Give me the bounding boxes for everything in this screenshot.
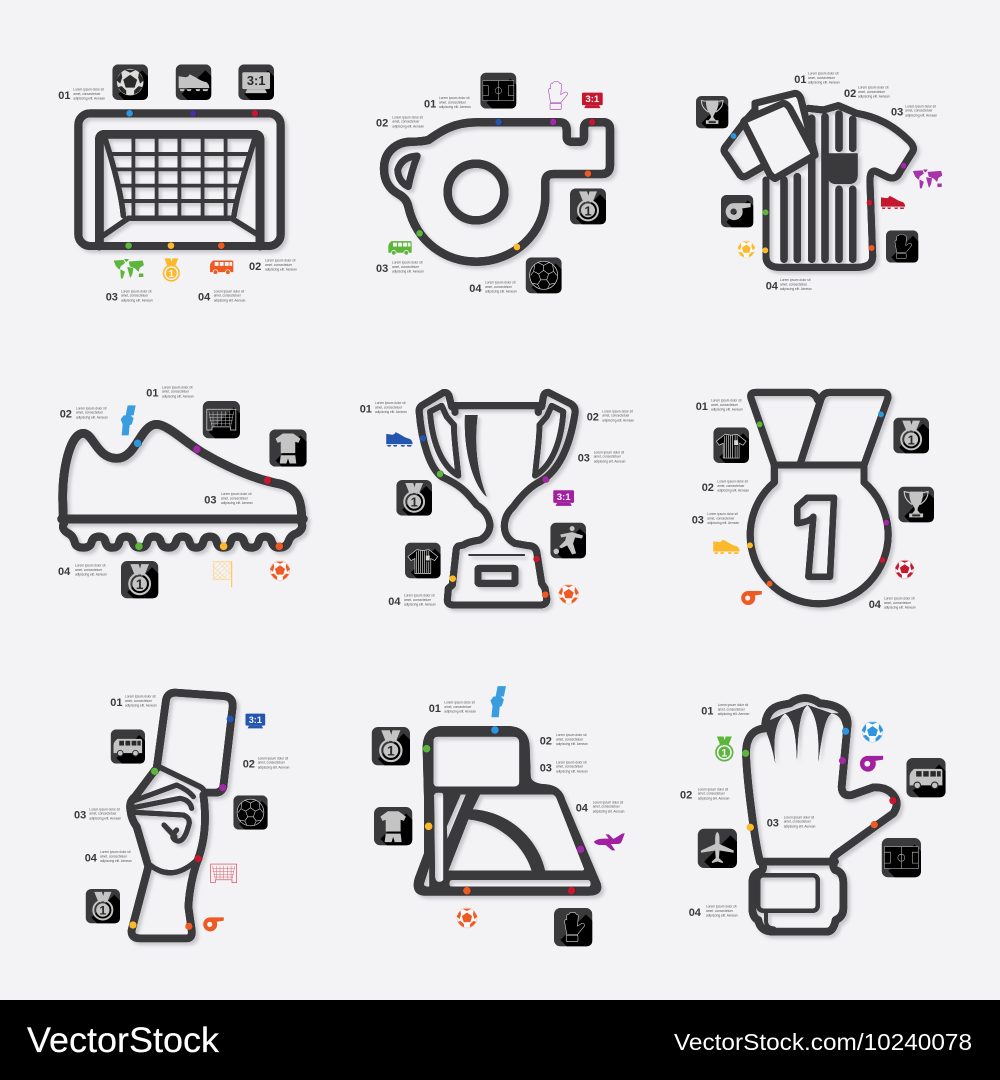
labels: 02: [540, 735, 552, 747]
labels: amet, consectetuer: [784, 820, 812, 824]
labels: [376, 96, 517, 295]
labels: 04: [576, 803, 589, 815]
panel: goal: [58, 64, 297, 304]
labels: Lorem ipsum dolor sit: [125, 695, 156, 699]
labels: amet, consectetuer: [100, 854, 128, 858]
labels: amet, consectetuer: [162, 390, 190, 394]
labels: Lorem ipsum dolor sit: [717, 480, 748, 484]
labels: adipiscing elit. Aenean: [905, 113, 937, 117]
labels: Lorem ipsum dolor sit: [718, 703, 748, 707]
labels: adipiscing elit. Aenean: [89, 816, 121, 820]
labels: 03: [74, 810, 86, 822]
labels: Lorem ipsum dolor sit: [444, 701, 475, 705]
labels: adipiscing elit. Aenean: [784, 824, 816, 828]
labels: 03: [376, 263, 388, 275]
panel: hand with card: [74, 693, 290, 938]
labels: Lorem ipsum dolor sit: [556, 760, 587, 764]
labels: adipiscing elit. Aenean: [556, 742, 588, 746]
labels: adipiscing elit. Aenean: [76, 415, 108, 419]
labels: 04: [469, 283, 482, 295]
labels: [360, 401, 634, 608]
panel: trophy: [360, 392, 634, 608]
route markers: [416, 119, 596, 250]
labels: adipiscing elit. Aenean: [404, 603, 436, 607]
footer brand: VectorStock: [27, 1021, 220, 1060]
labels: adipiscing elit. Aenean: [375, 410, 407, 414]
labels: Lorem ipsum dolor sit: [265, 259, 296, 263]
labels: adipiscing elit. Aenean: [858, 95, 890, 99]
labels: adipiscing elit. Aenean: [392, 124, 424, 128]
labels: adipiscing elit. Aenean: [75, 573, 107, 577]
labels: adipiscing elit. Aenean: [808, 81, 840, 85]
icons: [112, 64, 274, 281]
labels: Lorem ipsum dolor sit: [392, 115, 423, 119]
labels: 04: [766, 280, 779, 292]
labels: amet, consectetuer: [698, 792, 726, 796]
labels: amet, consectetuer: [905, 109, 933, 113]
labels: adipiscing elit. Aenean: [214, 298, 246, 302]
labels: Lorem ipsum dolor sit: [706, 905, 737, 909]
labels: 01: [58, 90, 71, 102]
labels: adipiscing elit. Aenean: [265, 268, 297, 272]
labels: Lorem ipsum dolor sit: [485, 281, 516, 285]
labels: amet, consectetuer: [121, 294, 149, 298]
labels: amet, consectetuer: [265, 263, 293, 267]
labels: 01: [110, 697, 123, 709]
labels: adipiscing elit. Aenean: [258, 765, 290, 769]
labels: 03: [692, 514, 704, 526]
labels: amet, consectetuer: [485, 285, 513, 289]
glove outline: [746, 698, 897, 932]
labels: 01: [701, 705, 714, 717]
labels: Lorem ipsum dolor sit: [121, 289, 152, 293]
icons: [698, 721, 946, 877]
labels: Lorem ipsum dolor sit: [858, 86, 889, 90]
labels: Lorem ipsum dolor sit: [784, 815, 814, 819]
icons: [388, 73, 606, 293]
labels: Lorem ipsum dolor sit: [100, 850, 131, 854]
labels: 01: [424, 98, 436, 110]
labels: Lorem ipsum dolor sit: [780, 278, 811, 282]
labels: adipiscing elit. Aenean: [707, 521, 739, 525]
labels: [692, 399, 916, 611]
labels: Lorem ipsum dolor sit: [73, 88, 104, 92]
labels: adipiscing elit. Aenean: [100, 859, 132, 863]
labels: Lorem ipsum dolor sit: [375, 401, 406, 405]
labels: 04: [58, 566, 71, 578]
icons: [372, 686, 625, 946]
route markers: [129, 715, 234, 930]
labels: Lorem ipsum dolor sit: [404, 594, 435, 598]
labels: amet, consectetuer: [258, 761, 286, 765]
labels: [429, 701, 625, 815]
labels: Lorem ipsum dolor sit: [89, 807, 120, 811]
route markers: [420, 435, 549, 598]
labels: Lorem ipsum dolor sit: [258, 756, 288, 760]
labels: adipiscing elit. Aenean: [485, 290, 517, 294]
labels: adipiscing elit. Aenean: [717, 489, 749, 493]
labels: adipiscing elit. Aenean: [780, 287, 812, 291]
labels: adipiscing elit. Aenean: [698, 796, 730, 800]
labels: 01: [429, 703, 441, 715]
icons: [86, 714, 268, 931]
labels: 03: [540, 763, 552, 775]
labels: Lorem ipsum dolor sit: [76, 406, 107, 410]
labels: amet, consectetuer: [221, 496, 249, 500]
labels: amet, consectetuer: [125, 699, 153, 703]
labels: 01: [146, 388, 159, 400]
panel: shin guard: [372, 686, 625, 946]
labels: 01: [360, 403, 372, 415]
labels: 04: [198, 292, 211, 304]
labels: Lorem ipsum dolor sit: [75, 564, 106, 568]
labels: [58, 385, 253, 578]
labels: amet, consectetuer: [858, 90, 886, 94]
labels: Lorem ipsum dolor sit: [162, 385, 193, 389]
labels: adipiscing elit. Aenean: [121, 298, 153, 302]
shirt outline: [724, 93, 913, 267]
labels: amet, consectetuer: [89, 812, 117, 816]
labels: adipiscing elit. Aenean: [593, 809, 625, 813]
labels: adipiscing elit. Aenean: [706, 914, 738, 918]
labels: Lorem ipsum dolor sit: [707, 512, 738, 516]
labels: adipiscing elit. Aenean: [125, 704, 157, 708]
footer image id: VectorStock.com/10240078: [674, 1029, 972, 1055]
labels: Lorem ipsum dolor sit: [905, 104, 936, 108]
labels: adipiscing elit. Aenean: [594, 459, 626, 463]
labels: amet, consectetuer: [556, 765, 584, 769]
labels: [766, 72, 937, 292]
labels: 03: [578, 453, 590, 465]
goal outline: [78, 113, 281, 246]
icons: [386, 432, 586, 604]
labels: Lorem ipsum dolor sit: [439, 96, 470, 100]
medal outline: [750, 392, 888, 604]
labels: amet, consectetuer: [718, 707, 746, 711]
labels: amet, consectetuer: [717, 484, 745, 488]
labels: Lorem ipsum dolor sit: [884, 597, 915, 601]
route markers: [742, 728, 897, 831]
trophy outline: [419, 392, 575, 605]
labels: 03: [767, 818, 779, 830]
labels: Lorem ipsum dolor sit: [594, 450, 624, 454]
labels: amet, consectetuer: [439, 100, 467, 104]
labels: adipiscing elit. Aenean: [884, 606, 916, 610]
labels: amet, consectetuer: [556, 737, 584, 741]
labels: amet, consectetuer: [808, 76, 836, 80]
labels: Lorem ipsum dolor sit: [808, 72, 839, 76]
labels: Lorem ipsum dolor sit: [392, 261, 423, 265]
labels: Lorem ipsum dolor sit: [698, 787, 728, 791]
icons: [696, 96, 942, 263]
labels: adipiscing elit. Aenean: [444, 710, 476, 714]
labels: 04: [388, 596, 401, 608]
panel: boot: [58, 385, 307, 598]
labels: amet, consectetuer: [594, 455, 622, 459]
panel: referee shirt: [696, 72, 942, 292]
labels: adipiscing elit. Aenean: [162, 394, 194, 398]
labels: adipiscing elit. Aenean: [392, 270, 424, 274]
labels: amet, consectetuer: [404, 598, 432, 602]
labels: 02: [249, 261, 261, 273]
labels: [74, 695, 290, 864]
labels: amet, consectetuer: [76, 411, 104, 415]
labels: amet, consectetuer: [375, 405, 403, 409]
labels: amet, consectetuer: [73, 92, 101, 96]
route markers: [731, 133, 907, 253]
labels: 02: [587, 412, 599, 424]
hand outline: [130, 693, 233, 938]
route markers: [125, 110, 258, 249]
shin guard outline: [414, 726, 601, 896]
labels: amet, consectetuer: [444, 705, 472, 709]
labels: amet, consectetuer: [593, 805, 621, 809]
labels: 01: [696, 401, 708, 413]
panel: whistle: [376, 73, 610, 295]
labels: Lorem ipsum dolor sit: [221, 492, 252, 496]
labels: Lorem ipsum dolor sit: [556, 733, 587, 737]
labels: 04: [689, 907, 702, 919]
labels: Lorem ipsum dolor sit: [711, 399, 742, 403]
labels: Lorem ipsum dolor sit: [593, 800, 623, 804]
icons: [121, 401, 307, 598]
panel: goalkeeper glove: [680, 698, 946, 932]
labels: 03: [204, 494, 217, 506]
labels: 02: [680, 790, 692, 802]
labels: adipiscing elit. Aenean: [73, 97, 105, 101]
panel: medal: [692, 392, 934, 611]
labels: amet, consectetuer: [214, 294, 242, 298]
labels: 02: [702, 482, 714, 494]
footer bar: [0, 1000, 1000, 1080]
labels: Lorem ipsum dolor sit: [214, 289, 244, 293]
labels: 02: [60, 409, 72, 421]
icons: [713, 418, 934, 605]
labels: [680, 703, 816, 919]
labels: [58, 88, 297, 304]
labels: 04: [85, 852, 98, 864]
labels: adipiscing elit. Aenean: [439, 105, 471, 109]
labels: 02: [243, 759, 255, 771]
route markers: [423, 726, 584, 894]
labels: adipiscing elit. Aenean: [602, 418, 634, 422]
labels: 04: [869, 599, 882, 611]
labels: 03: [891, 107, 903, 119]
labels: amet, consectetuer: [392, 265, 420, 269]
labels: 02: [376, 118, 388, 130]
labels: amet, consectetuer: [707, 516, 735, 520]
route markers: [747, 411, 889, 587]
labels: adipiscing elit. Aenean: [718, 712, 750, 716]
labels: amet, consectetuer: [711, 403, 739, 407]
labels: adipiscing elit. Aenean: [711, 408, 743, 412]
labels: adipiscing elit. Aenean: [556, 769, 588, 773]
labels: amet, consectetuer: [392, 120, 420, 124]
labels: amet, consectetuer: [706, 909, 734, 913]
labels: 01: [794, 74, 807, 86]
route markers: [134, 439, 283, 550]
labels: Lorem ipsum dolor sit: [602, 409, 633, 413]
labels: amet, consectetuer: [780, 282, 808, 286]
whistle outline: [384, 122, 610, 262]
labels: amet, consectetuer: [602, 414, 630, 418]
labels: adipiscing elit. Aenean: [221, 501, 253, 505]
labels: amet, consectetuer: [884, 601, 912, 605]
boot outline: [62, 424, 303, 548]
labels: amet, consectetuer: [75, 568, 103, 572]
labels: 02: [844, 88, 856, 100]
labels: 03: [106, 292, 118, 304]
